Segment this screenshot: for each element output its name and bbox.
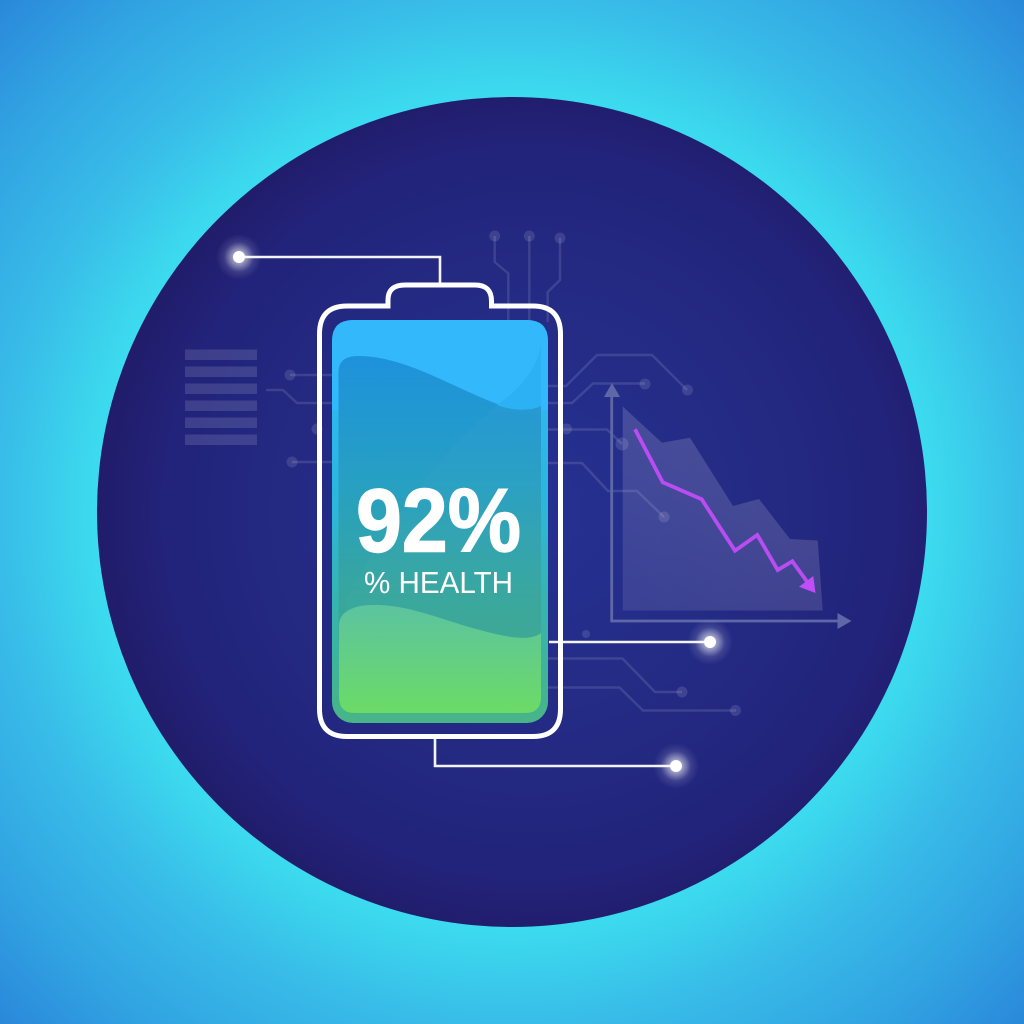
connector node: top left (216, 234, 262, 280)
connector lines (239, 257, 710, 766)
health value: 92% (356, 472, 521, 572)
chart area (623, 406, 823, 610)
axis arrowheads (604, 383, 852, 629)
inner liquid panel with wave top (338, 356, 541, 645)
declining health chart (604, 383, 852, 629)
connector node: right (687, 619, 733, 665)
faint circuit traces (266, 230, 741, 716)
top-right sheen (497, 345, 541, 410)
health label: % HEALTH (364, 565, 513, 600)
icon: faint list lines (185, 350, 257, 445)
connector node: bottom (653, 743, 699, 789)
dark central circle (97, 97, 927, 927)
trend arrowhead (799, 576, 816, 593)
battery casing fill (332, 320, 548, 723)
purple trend line (635, 429, 808, 583)
battery outline (320, 285, 560, 736)
diagonal sheen (345, 405, 541, 645)
top light-blue band (332, 320, 548, 410)
chart axes (612, 394, 840, 621)
battery (320, 285, 560, 736)
green wave (339, 605, 541, 713)
